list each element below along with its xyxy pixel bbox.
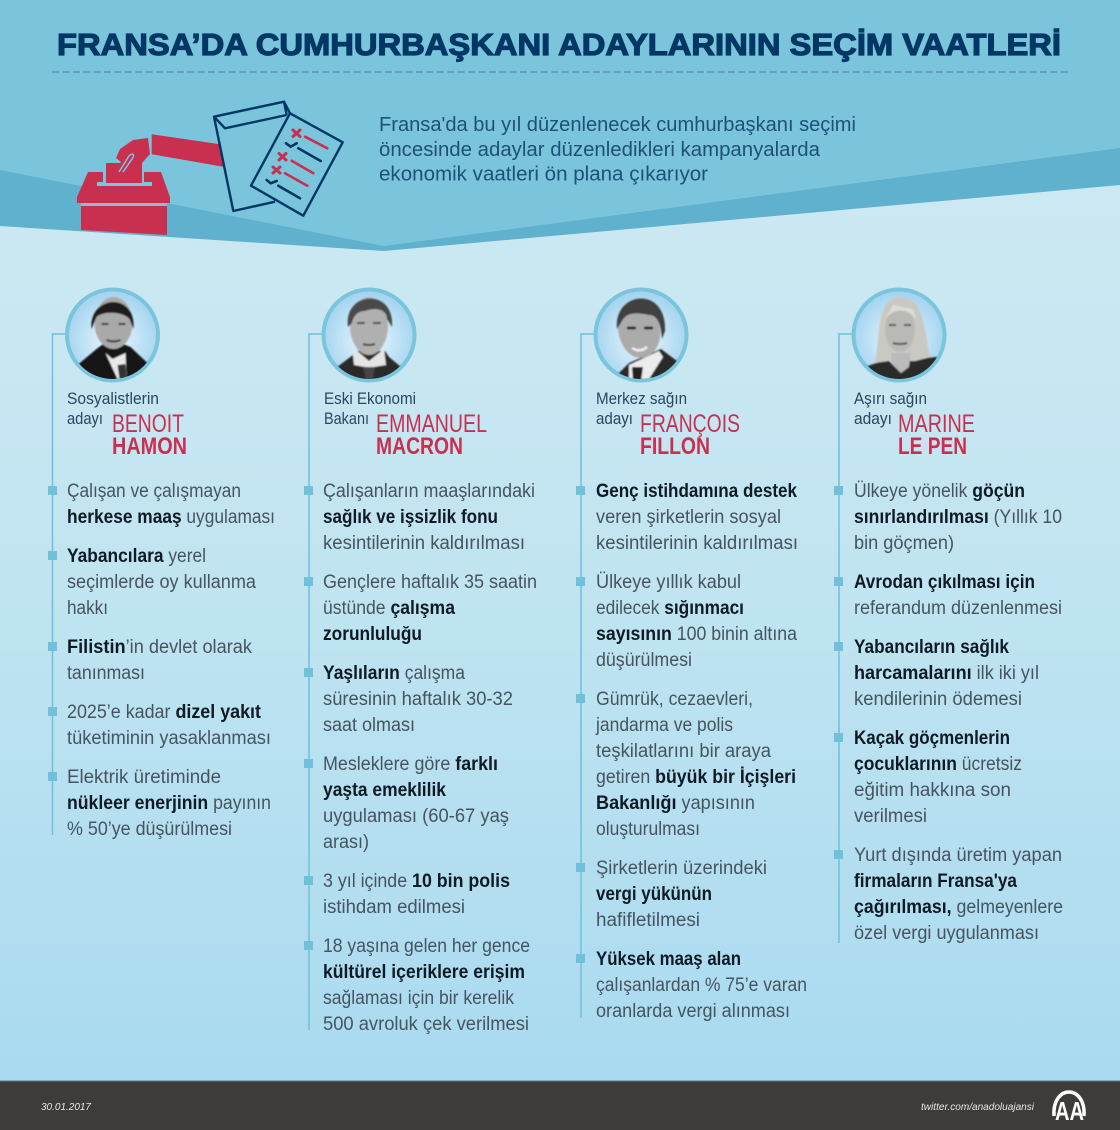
promises: Macron: sağlık ve işsizlik fonu	[323, 507, 498, 528]
candidate label: Macron: Eski Ekonomi	[324, 389, 416, 408]
candidate label: Fillon	[596, 389, 740, 460]
promises: Hamon: nükleer enerjinin payının	[67, 793, 271, 814]
promises: Macron: arası)	[323, 832, 369, 853]
candidate label: Fillon: adayı	[596, 409, 633, 428]
promises: Fillon: Şirketlerin üzerindeki	[596, 858, 767, 879]
promises: Hamon: tüketiminin yasaklanması	[67, 728, 271, 749]
promises: Fillon: oluşturulması	[596, 819, 700, 840]
promises: Hamon: tanınması	[67, 663, 145, 684]
promises: Macron: Çalışanların maaşlarındaki	[323, 481, 535, 502]
promises: Le Pen: özel vergi uygulanması	[854, 923, 1039, 944]
promises: Le Pen: harcamalarını ilk iki yıl	[854, 663, 1039, 684]
promises: Fillon: düşürülmesi	[596, 650, 692, 671]
promises: Hamon: % 50’ye düşürülmesi	[67, 819, 232, 840]
promises: Macron: uygulaması (60-67 yaş	[323, 806, 509, 827]
promises: Fillon: Bakanlığı yapısının	[596, 793, 755, 814]
title: FRANSA’DA CUMHURBAŞKANI ADAYLARININ SEÇİM VAATLERİ	[57, 27, 1061, 62]
promises: Macron: 18 yaşına gelen her gence	[323, 936, 530, 957]
date: 30.01.2017	[41, 1101, 92, 1113]
promises: Fillon: hafifletilmesi	[596, 910, 700, 931]
promises: Macron: zorunluluğu	[323, 624, 422, 645]
promises: Fillon: jandarma ve polis	[595, 715, 733, 736]
promises: Hamon: herkese maaş uygulaması	[67, 507, 275, 528]
promises: Le Pen: bin göçmen)	[854, 533, 954, 554]
candidate label: Macron: Bakanı	[324, 409, 369, 428]
candidate label: Le Pen: MARINE	[898, 410, 975, 438]
promises: Hamon	[48, 481, 275, 840]
intro text	[379, 114, 856, 186]
promises: Macron: Mesleklere göre farklı	[323, 754, 498, 775]
panel: Benoit Hamon	[48, 290, 275, 840]
candidate label: Hamon: HAMON	[112, 433, 187, 460]
promises: Le Pen: Yurt dışında üretim yapan	[854, 845, 1062, 866]
promises: Hamon: 2025’e kadar dizel yakıt	[67, 702, 262, 723]
promises: Le Pen: Kaçak göçmenlerin	[854, 728, 1010, 749]
header band	[0, 0, 1120, 251]
promises: Fillon	[576, 481, 807, 1022]
promises: Fillon: Ülkeye yıllık kabul	[596, 572, 741, 593]
promises: Macron	[304, 481, 537, 1035]
icon: AA logo	[1054, 1092, 1084, 1126]
portrait: Le Pen	[854, 290, 944, 385]
panel: Emmanuel Macron	[304, 290, 537, 1035]
candidate label: Hamon	[67, 389, 187, 460]
promises: Fillon: sayısının 100 binin altına	[596, 624, 797, 645]
candidate label: Macron: MACRON	[376, 433, 463, 460]
candidate label: Fillon: Merkez sağın	[596, 389, 687, 408]
portrait: Fillon	[596, 290, 686, 385]
candidate label: Fillon: FRANÇOIS	[640, 410, 740, 438]
candidate label: Le Pen: Aşırı sağın	[854, 389, 927, 408]
promises: Fillon: getiren büyük bir İçişleri	[596, 767, 796, 788]
promises: Hamon: Yabancılara yerel	[67, 546, 206, 567]
promises: Macron: kesintilerinin kaldırılması	[323, 533, 525, 554]
candidate label: Le Pen	[854, 389, 975, 460]
promises: Fillon: edilecek sığınmacı	[596, 598, 744, 619]
promises: Le Pen: verilmesi	[854, 806, 927, 827]
promises: Le Pen: Ülkeye yönelik göçün	[854, 481, 1025, 502]
promises: Le Pen: çağırılması, gelmeyenlere	[854, 897, 1063, 918]
candidate label: Fillon: FILLON	[640, 433, 710, 460]
candidate label: Macron	[324, 389, 487, 460]
promises: Hamon: hakkı	[67, 598, 108, 619]
icon: AA logo: AA	[1055, 1096, 1084, 1126]
intro text: öncesinde adaylar düzenledikleri kampanyalarda	[379, 139, 821, 161]
promises: Fillon: veren şirketlerin sosyal	[596, 507, 781, 528]
promises: Le Pen: referandum düzenlenmesi	[854, 598, 1062, 619]
promises: Macron: 500 avroluk çek verilmesi	[323, 1014, 529, 1035]
promises: Hamon: Filistin’in devlet olarak	[67, 637, 252, 658]
promises: Macron: süresinin haftalık 30-32	[323, 689, 513, 710]
promises: Macron: sağlaması için bir kerelik	[323, 988, 514, 1009]
promises: Macron: Yaşlıların çalışma	[323, 663, 465, 684]
panel: François Fillon	[576, 290, 807, 1022]
promises: Fillon: oranlarda vergi alınması	[596, 1001, 790, 1022]
footer	[0, 1081, 1120, 1130]
candidate label: Hamon: BENOIT	[112, 410, 184, 438]
promises: Fillon: çalışanlardan % 75’e varan	[596, 975, 807, 996]
promises: Macron: kültürel içeriklere erişim	[323, 962, 525, 983]
candidate label: Le Pen: LE PEN	[898, 433, 967, 460]
promises: Macron: 3 yıl içinde 10 bin polis	[323, 871, 510, 892]
promises: Macron: saat olması	[323, 715, 415, 736]
intro text: ekonomik vaatleri ön plana çıkarıyor	[379, 164, 708, 186]
promises: Le Pen: çocuklarının ücretsiz	[854, 754, 1022, 775]
promises: Hamon: seçimlerde oy kullanma	[67, 572, 256, 593]
promises: Macron: Gençlere haftalık 35 saatin	[323, 572, 537, 593]
promises: Le Pen: firmaların Fransa'ya	[854, 871, 1017, 892]
promises: Le Pen	[834, 481, 1063, 944]
promises: Hamon: Elektrik üretiminde	[67, 767, 221, 788]
promises: Fillon: Genç istihdamına destek	[596, 481, 797, 502]
candidate label: Le Pen: adayı	[854, 409, 892, 428]
promises: Fillon: teşkilatlarını bir araya	[596, 741, 771, 762]
social handle: twitter.com/anadoluajansi	[921, 1101, 1035, 1113]
portrait: Hamon	[67, 290, 158, 385]
portrait: Macron	[324, 290, 414, 385]
promises: Macron: istihdam edilmesi	[323, 897, 465, 918]
promises: Fillon: Yüksek maaş alan	[596, 949, 741, 970]
candidate label: Hamon: Sosyalistlerin	[67, 389, 159, 408]
panel: Marine Le Pen	[834, 290, 1063, 944]
promises: Macron: üstünde çalışma	[323, 598, 455, 619]
promises: Macron: yaşta emeklilik	[323, 780, 446, 801]
candidate label: Macron: EMMANUEL	[376, 410, 487, 438]
candidate label: Hamon: adayı	[67, 409, 103, 428]
intro text: Fransa'da bu yıl düzenlenecek cumhurbaşkanı seçimi	[379, 114, 856, 136]
icon: ballot box with hand and checklist	[77, 102, 343, 235]
promises: Le Pen: Yabancıların sağlık	[854, 637, 1009, 658]
promises: Le Pen: sınırlandırılması (Yıllık 10	[854, 507, 1062, 528]
promises: Fillon: vergi yükünün	[596, 884, 712, 905]
promises: Le Pen: eğitim hakkına son	[854, 780, 1011, 801]
promises: Fillon: kesintilerinin kaldırılması	[596, 533, 798, 554]
promises: Le Pen: Avrodan çıkılması için	[854, 572, 1035, 593]
promises: Fillon: Gümrük, cezaevleri,	[596, 689, 753, 710]
promises: Le Pen: kendilerinin ödemesi	[854, 689, 1022, 710]
promises: Hamon: Çalışan ve çalışmayan	[67, 481, 241, 502]
